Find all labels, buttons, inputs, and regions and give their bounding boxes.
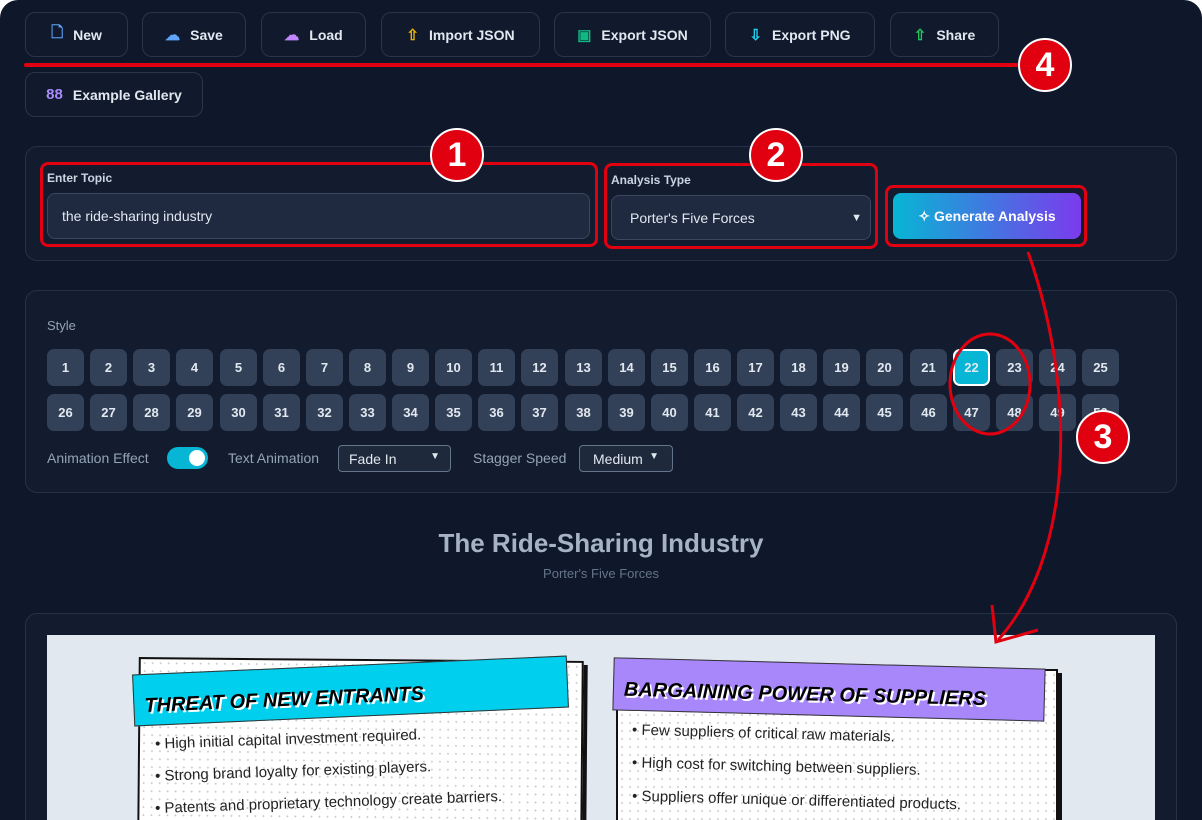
annotation badge 4 [1018, 38, 1072, 92]
style buttons grid: 43 [791, 405, 806, 420]
select: analysis type [611, 195, 871, 240]
style buttons grid: 9 [407, 360, 414, 375]
style buttons grid: 42 [748, 405, 763, 420]
input: topic [47, 193, 590, 239]
annotation box 3 [885, 185, 1087, 247]
style buttons grid: 48 [1007, 405, 1022, 420]
label: Style: Style [47, 318, 76, 333]
style buttons grid: 50 [1093, 405, 1108, 420]
toolbar button: Example Gallery [25, 72, 203, 117]
subtitle: Porter's Five Forces [543, 566, 659, 581]
style buttons grid: 31 [274, 405, 289, 420]
card heading [612, 657, 1046, 722]
toolbar button: New [25, 12, 128, 57]
card heading [132, 656, 569, 726]
style buttons grid: 13 [576, 360, 591, 375]
style buttons grid: 15 [662, 360, 677, 375]
style buttons grid: 17 [748, 360, 763, 375]
annotation line 4 [24, 63, 1034, 67]
controls row: ▼ [649, 451, 659, 462]
toolbar button: Share: ⇧ [914, 26, 926, 44]
style buttons grid: 40 [662, 405, 677, 420]
style buttons grid: 29 [187, 405, 202, 420]
card heading: BARGAINING POWER OF SUPPLIERS [624, 679, 986, 710]
style buttons grid: 28 [144, 405, 159, 420]
annotation badge 4: 4 [1036, 46, 1054, 84]
title: The Ride-Sharing Industry [438, 528, 764, 558]
card: bargaining power of suppliers [612, 657, 1062, 820]
style buttons grid: 14 [619, 360, 634, 375]
style buttons grid: 47 [964, 405, 979, 420]
style buttons grid: 26 [58, 405, 73, 420]
style buttons grid: 8 [364, 360, 371, 375]
style buttons grid: 23 [1007, 360, 1022, 375]
toolbar button: Import JSON [381, 12, 540, 57]
controls row: Stagger Speed [473, 450, 566, 466]
toolbar button: Import JSON: ⇧ [406, 26, 419, 44]
style buttons grid: 11 [490, 360, 503, 375]
style buttons grid: 18 [791, 360, 806, 375]
toolbar button: Load: ☁ [284, 26, 299, 44]
card: bargaining power of suppliers: • High cost for switching between suppliers. [632, 754, 921, 779]
controls row: Fade In [349, 451, 396, 467]
style buttons grid: 16 [705, 360, 720, 375]
annotation badge 2: 2 [767, 136, 785, 174]
style buttons grid: 3 [148, 360, 155, 375]
toolbar button: Export JSON: ▣ [577, 26, 591, 44]
style buttons grid: 34 [403, 405, 418, 420]
style buttons grid: 4 [191, 360, 198, 375]
style buttons grid: 45 [877, 405, 892, 420]
label: Analysis Type: Analysis Type [611, 173, 691, 187]
card: bargaining power of suppliers: • Suppliers offer unique or differentiated products. [632, 788, 961, 813]
card: threat of new entrants: • Patents and proprietary technology create barriers. [155, 788, 502, 817]
style buttons grid: 1 [62, 360, 69, 375]
style buttons grid: 44 [834, 405, 849, 420]
input: topic: the ride-sharing industry [62, 208, 212, 224]
style buttons grid: 24 [1050, 360, 1065, 375]
panel: infographic preview [25, 613, 1177, 820]
style buttons grid: 20 [877, 360, 892, 375]
style buttons grid: 30 [231, 405, 246, 420]
style buttons grid: 36 [489, 405, 504, 420]
annotation badge 1: 1 [448, 136, 466, 174]
button: Generate Analysis: ✧ Generate Analysis [918, 208, 1056, 224]
style buttons grid: 46 [921, 405, 936, 420]
card: threat of new entrants: • High initial capital investment required. [155, 726, 421, 753]
style buttons grid: 21 [921, 360, 936, 375]
select: analysis type: ▼ [851, 212, 862, 224]
style buttons grid: 25 [1093, 360, 1108, 375]
style buttons grid: 32 [317, 405, 332, 420]
toolbar button: New: New [73, 26, 102, 42]
toolbar button: Example Gallery: Example Gallery [73, 86, 182, 102]
toolbar button: New: 🗋 [51, 24, 63, 41]
style buttons grid: 27 [101, 405, 116, 420]
controls row: Text Animation [228, 450, 319, 466]
toolbar button: Share [890, 12, 999, 57]
toolbar button: Import JSON: Import JSON [429, 26, 515, 42]
style buttons grid: 19 [834, 360, 849, 375]
annotation badge 3 [1076, 410, 1130, 464]
annotation badge 1 [430, 128, 484, 182]
button: Generate Analysis [893, 193, 1081, 239]
toolbar button: Export JSON [554, 12, 711, 57]
controls row: Medium [593, 451, 643, 467]
style buttons grid: 7 [321, 360, 328, 375]
card: threat of new entrants [132, 656, 588, 820]
style buttons grid: 6 [278, 360, 285, 375]
toolbar button: Load: Load [309, 26, 343, 42]
toolbar button: Export JSON: Export JSON [601, 26, 688, 42]
style buttons grid [47, 349, 1119, 431]
style buttons grid: 12 [532, 360, 547, 375]
annotation badge 3: 3 [1094, 418, 1112, 456]
toolbar button: Export PNG: Export PNG [772, 26, 851, 42]
style buttons grid: 5 [235, 360, 242, 375]
annotation box 1 [40, 162, 598, 247]
controls row: ▼ [430, 451, 440, 462]
annotation badge 2 [749, 128, 803, 182]
toolbar button: Save [142, 12, 246, 57]
controls row: Animation Effect [47, 450, 149, 466]
style buttons grid: 33 [360, 405, 375, 420]
label: Enter Topic: Enter Topic [47, 171, 112, 185]
style buttons grid: 35 [446, 405, 461, 420]
panel: topic input [25, 146, 1177, 261]
toolbar button: Example Gallery: 88 [46, 86, 63, 103]
card: threat of new entrants: • Strong brand loyalty for existing players. [155, 758, 431, 785]
style buttons grid: 38 [576, 405, 591, 420]
card: bargaining power of suppliers: • Few suppliers of critical raw materials. [632, 722, 895, 745]
toolbar button: Load [261, 12, 366, 57]
controls row [47, 445, 673, 472]
toolbar button: Save: Save [190, 26, 223, 42]
toolbar button: Export PNG: ⇩ [749, 26, 762, 44]
card heading: THREAT OF NEW ENTRANTS [144, 683, 424, 717]
annotation box 2 [604, 163, 878, 249]
toolbar button: Save: ☁ [165, 26, 180, 44]
style buttons grid: 49 [1050, 405, 1065, 420]
style buttons grid: 2 [105, 360, 112, 375]
toolbar button: Share: Share [936, 26, 975, 42]
style buttons grid: 22 [964, 360, 979, 375]
style buttons grid: 10 [446, 360, 461, 375]
style buttons grid: 37 [532, 405, 547, 420]
style buttons grid: 41 [705, 405, 720, 420]
toolbar button: Export PNG [725, 12, 875, 57]
select: analysis type: Porter's Five Forces [630, 210, 755, 226]
panel: style [25, 290, 1177, 493]
style buttons grid: 39 [619, 405, 634, 420]
